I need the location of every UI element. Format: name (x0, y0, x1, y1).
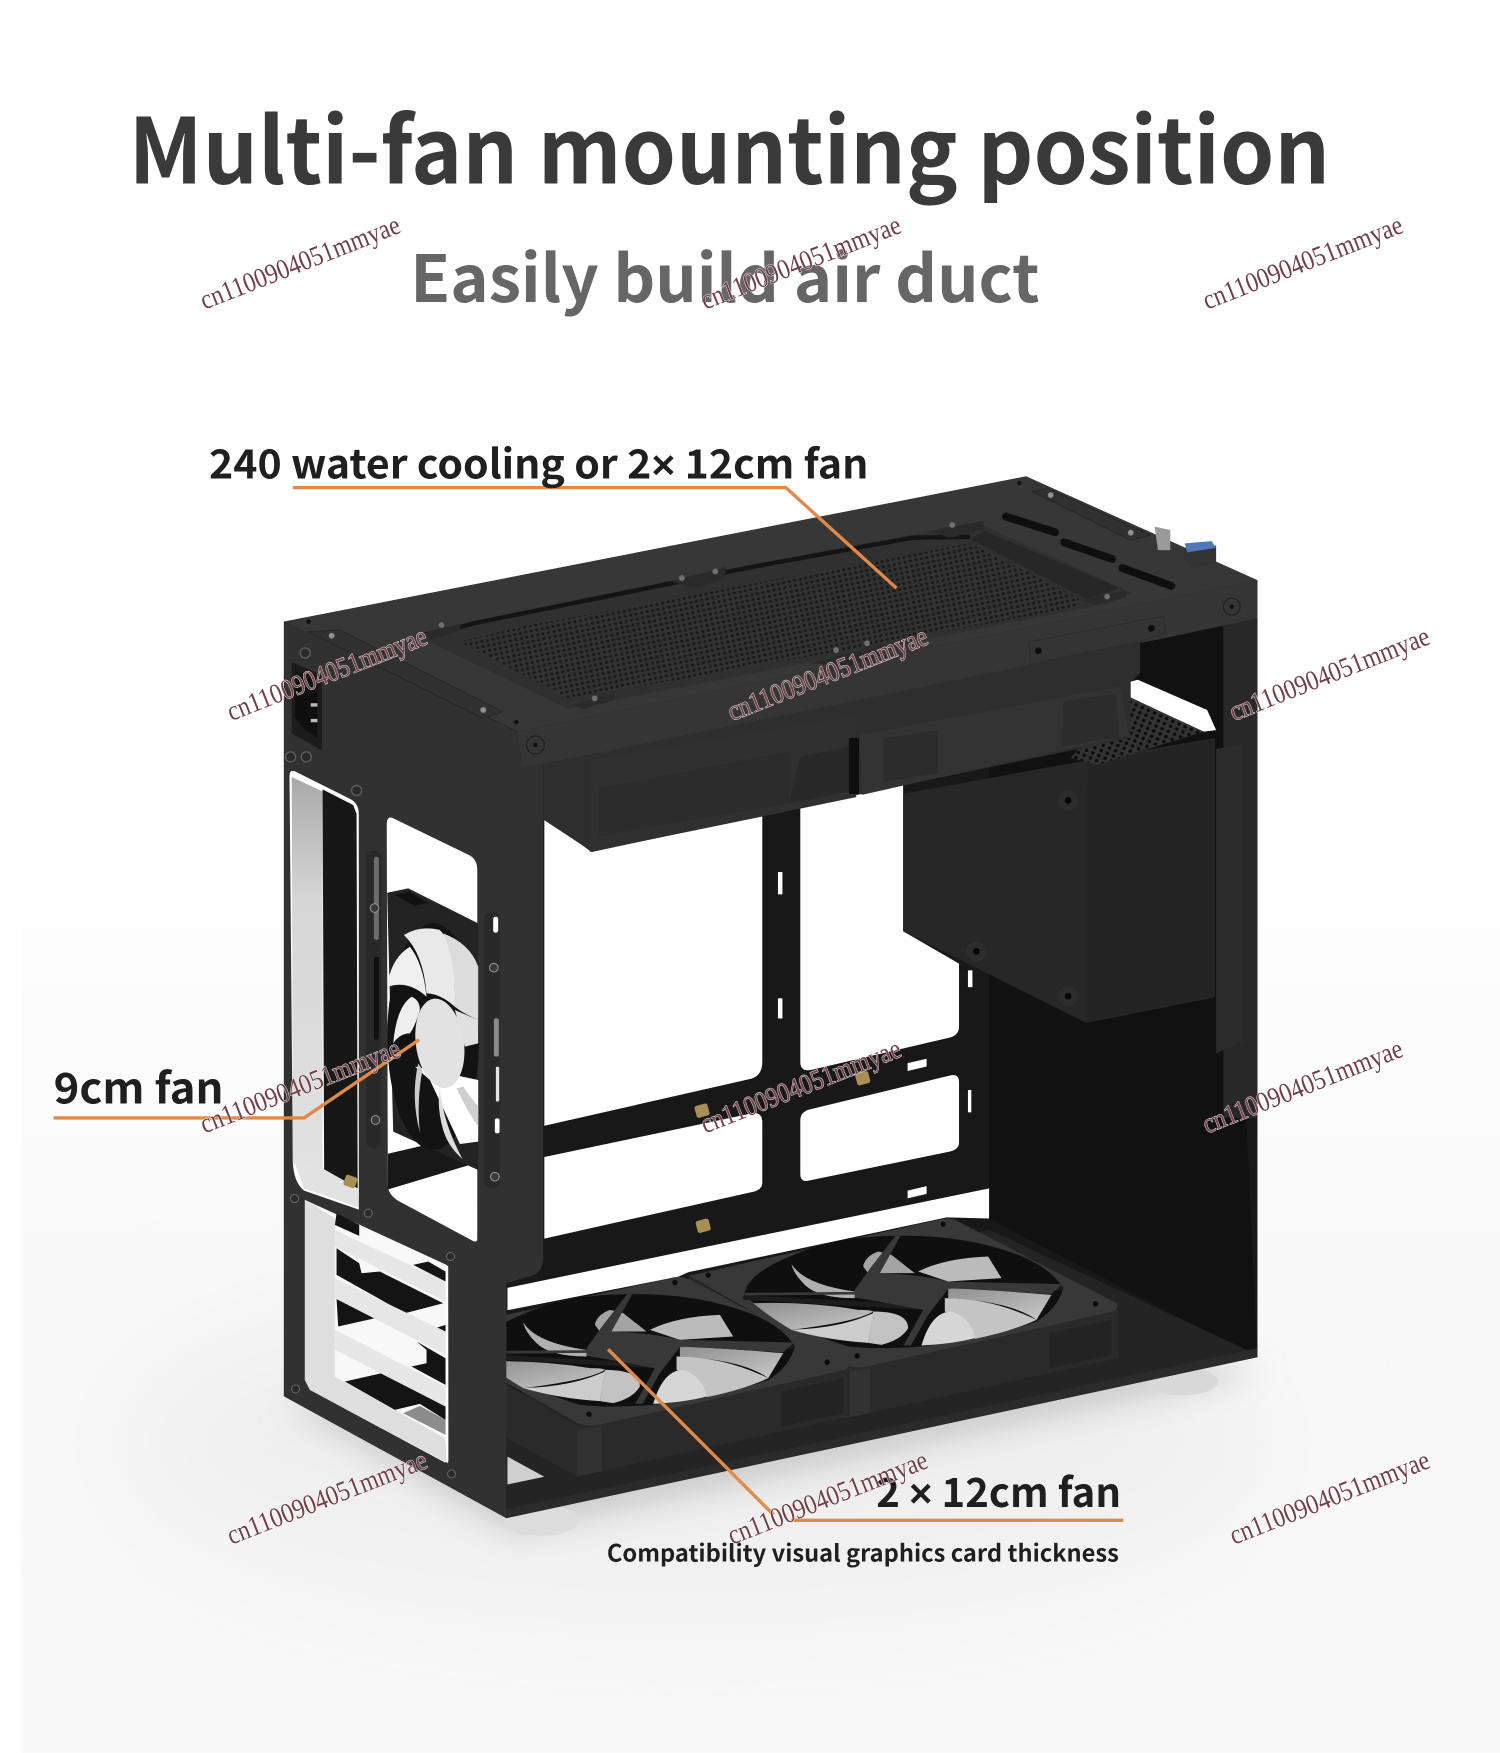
radiator brackets (423, 521, 1127, 709)
radiator frame recess (419, 526, 1131, 709)
left side panel (284, 622, 543, 1518)
watermarks: cn1100904051mmyae (1225, 1445, 1434, 1551)
side fan rails (366, 851, 500, 1188)
side window (387, 818, 477, 1242)
power socket (292, 662, 322, 750)
top plate (284, 476, 1257, 731)
9cm fan (387, 888, 479, 1170)
radiator mesh (459, 543, 1079, 699)
front band plate (1029, 616, 1166, 664)
ground shadow (112, 1274, 1274, 1610)
watermarks: cn1100904051mmyae (1198, 1033, 1407, 1140)
silver expansion bracket (291, 1195, 456, 1478)
callout: 2 x 12cm fan: 2 × 12cm fan (876, 1460, 1121, 1519)
upper right white slit (1120, 680, 1216, 732)
front-floor fan (421, 1277, 850, 1477)
power supply box (903, 693, 1215, 1023)
front floor strip (507, 1457, 544, 1485)
feet (503, 1368, 1218, 1536)
brass standoffs (694, 1071, 871, 1233)
tray cut-outs (507, 783, 989, 1310)
panel screws (286, 648, 362, 795)
watermarks: cn1100904051mmyae (1198, 210, 1407, 316)
callout: 240 water cooling (209, 432, 896, 588)
top vent slots (1006, 517, 1171, 586)
corner screws (306, 481, 1240, 754)
right pillar (1216, 580, 1257, 1118)
callout: 9cm fan (54, 1040, 419, 1118)
watermarks: cn1100904051mmyae (196, 1033, 405, 1140)
callout: 9cm fan: 9cm fan (54, 1055, 224, 1116)
watermarks: cn1100904051mmyae (723, 621, 932, 728)
watermarks: cn1100904051mmyae (723, 1445, 932, 1551)
white left margin (0, 0, 21, 1753)
watermarks (196, 210, 1434, 1551)
callout: 2 x 12cm fan: Compatibility visual graphics card thickness (607, 1535, 1119, 1569)
bar behind window (388, 1140, 477, 1189)
floor edge (506, 1348, 1257, 1518)
subtitle: Easily build air duct (410, 227, 1039, 321)
PC case illustration (284, 476, 1257, 1536)
watermarks: cn1100904051mmyae (696, 1033, 905, 1140)
watermarks: cn1100904051mmyae (696, 210, 905, 316)
front I/O ports (1155, 527, 1216, 568)
title: Multi-fan mounting position (129, 80, 1330, 211)
top fans and shroud (543, 643, 1140, 852)
front top band (518, 580, 1257, 767)
watermarks: cn1100904051mmyae (1225, 621, 1434, 728)
watermarks: cn1100904051mmyae (223, 621, 432, 728)
case silhouette (284, 476, 1257, 1518)
callout: 2 x 12cm fan (607, 1349, 1123, 1569)
watermarks: cn1100904051mmyae (223, 1445, 432, 1551)
watermarks: cn1100904051mmyae (196, 210, 405, 316)
floor plate (506, 1230, 1257, 1518)
silver rear slot bracket (289, 771, 359, 1210)
top raised strips (308, 488, 1151, 718)
callout: 240 water cooling: 240 water cooling or 2× 12cm fan (209, 432, 868, 491)
right inner wall (989, 626, 1257, 1357)
rear-floor fan (689, 1219, 1118, 1418)
